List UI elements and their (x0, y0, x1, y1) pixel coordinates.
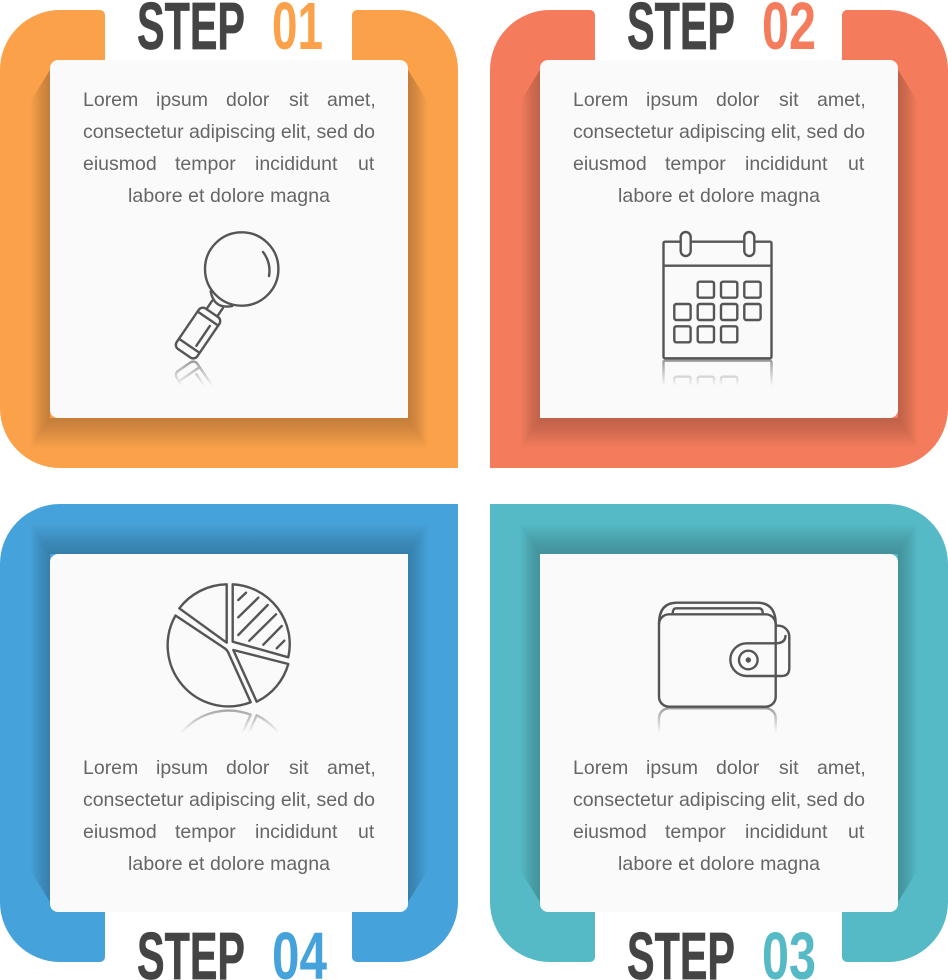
text block: step 04: sit (289, 757, 309, 779)
text block: step 04: ipsum (156, 757, 208, 779)
panel: step 01 (0, 0, 458, 488)
text block: step 02: sit (779, 89, 799, 111)
text block: step 03: amet, (817, 757, 866, 779)
text block: step 02: Lorem (573, 89, 628, 111)
text block: step 03: ut (848, 821, 865, 843)
text block: step 02: dolor (716, 89, 760, 111)
card (540, 60, 898, 418)
text block: step 01: tempor (175, 153, 236, 175)
text block: step 03: ipsum (646, 757, 698, 779)
text block: step 03: labore et dolore magna (618, 853, 820, 875)
text block: step 01: sit (289, 89, 309, 111)
panel frame blue (0, 504, 458, 962)
icon: pie chart (168, 584, 290, 833)
text block: step 02: labore et dolore magna (618, 185, 820, 207)
text block: step 04: ut (358, 821, 375, 843)
text block: step 03: incididunt (745, 821, 828, 843)
text block: step 03: dolor (716, 757, 760, 779)
text block: step 02: amet, (817, 89, 866, 111)
icon: magnifying glass (173, 232, 278, 488)
text block: step 04: incididunt (255, 821, 338, 843)
text block: step 03: tempor (665, 821, 726, 843)
text block: step 04: dolor (226, 757, 270, 779)
text block: step 03: Lorem (573, 757, 628, 779)
panel frame orange (0, 10, 458, 468)
text block: step 01: ipsum (156, 89, 208, 111)
panel: step 04 (0, 504, 458, 980)
card shadow (520, 523, 918, 902)
text block: step 03: sit (779, 757, 799, 779)
text block: step 03: eiusmod (573, 821, 647, 843)
text block: step 02: ipsum (646, 89, 698, 111)
text block: step 02: eiusmod (573, 153, 647, 175)
icon: calendar (662, 230, 773, 384)
text block: step 02: incididunt (745, 153, 828, 175)
card shadow (30, 523, 428, 902)
text block: step 04: Lorem (83, 757, 138, 779)
text block: step 01: labore et dolore magna (128, 185, 330, 207)
text block: step 01: dolor (226, 89, 270, 111)
text block: step 01: ut (358, 153, 375, 175)
text block: step 02: consectetur adipiscing elit, sed do (573, 121, 865, 143)
text block: step 04: amet, (327, 757, 376, 779)
panel frame red (490, 10, 948, 468)
text block: step 01: consectetur adipiscing elit, sed do (83, 121, 375, 143)
panel frame teal (490, 504, 948, 962)
card (50, 554, 408, 912)
text block: step 02: ut (848, 153, 865, 175)
text block: step 04: consectetur adipiscing elit, sed do (83, 789, 375, 811)
panel: step 02 (490, 0, 948, 487)
card shadow (520, 70, 918, 449)
text block: step 03: consectetur adipiscing elit, sed do (573, 789, 865, 811)
card (540, 554, 898, 912)
text block: step 04: labore et dolore magna (128, 853, 330, 875)
card (50, 60, 408, 418)
icon: wallet (658, 602, 790, 731)
card shadow (30, 70, 428, 449)
text block: step 01: incididunt (255, 153, 338, 175)
text block: step 04: tempor (175, 821, 236, 843)
panel: step 03 (490, 504, 948, 980)
text block: step 01: amet, (327, 89, 376, 111)
text block: step 02: tempor (665, 153, 726, 175)
text block: step 01: eiusmod (83, 153, 157, 175)
text block: step 04: eiusmod (83, 821, 157, 843)
text block: step 01: Lorem (83, 89, 138, 111)
